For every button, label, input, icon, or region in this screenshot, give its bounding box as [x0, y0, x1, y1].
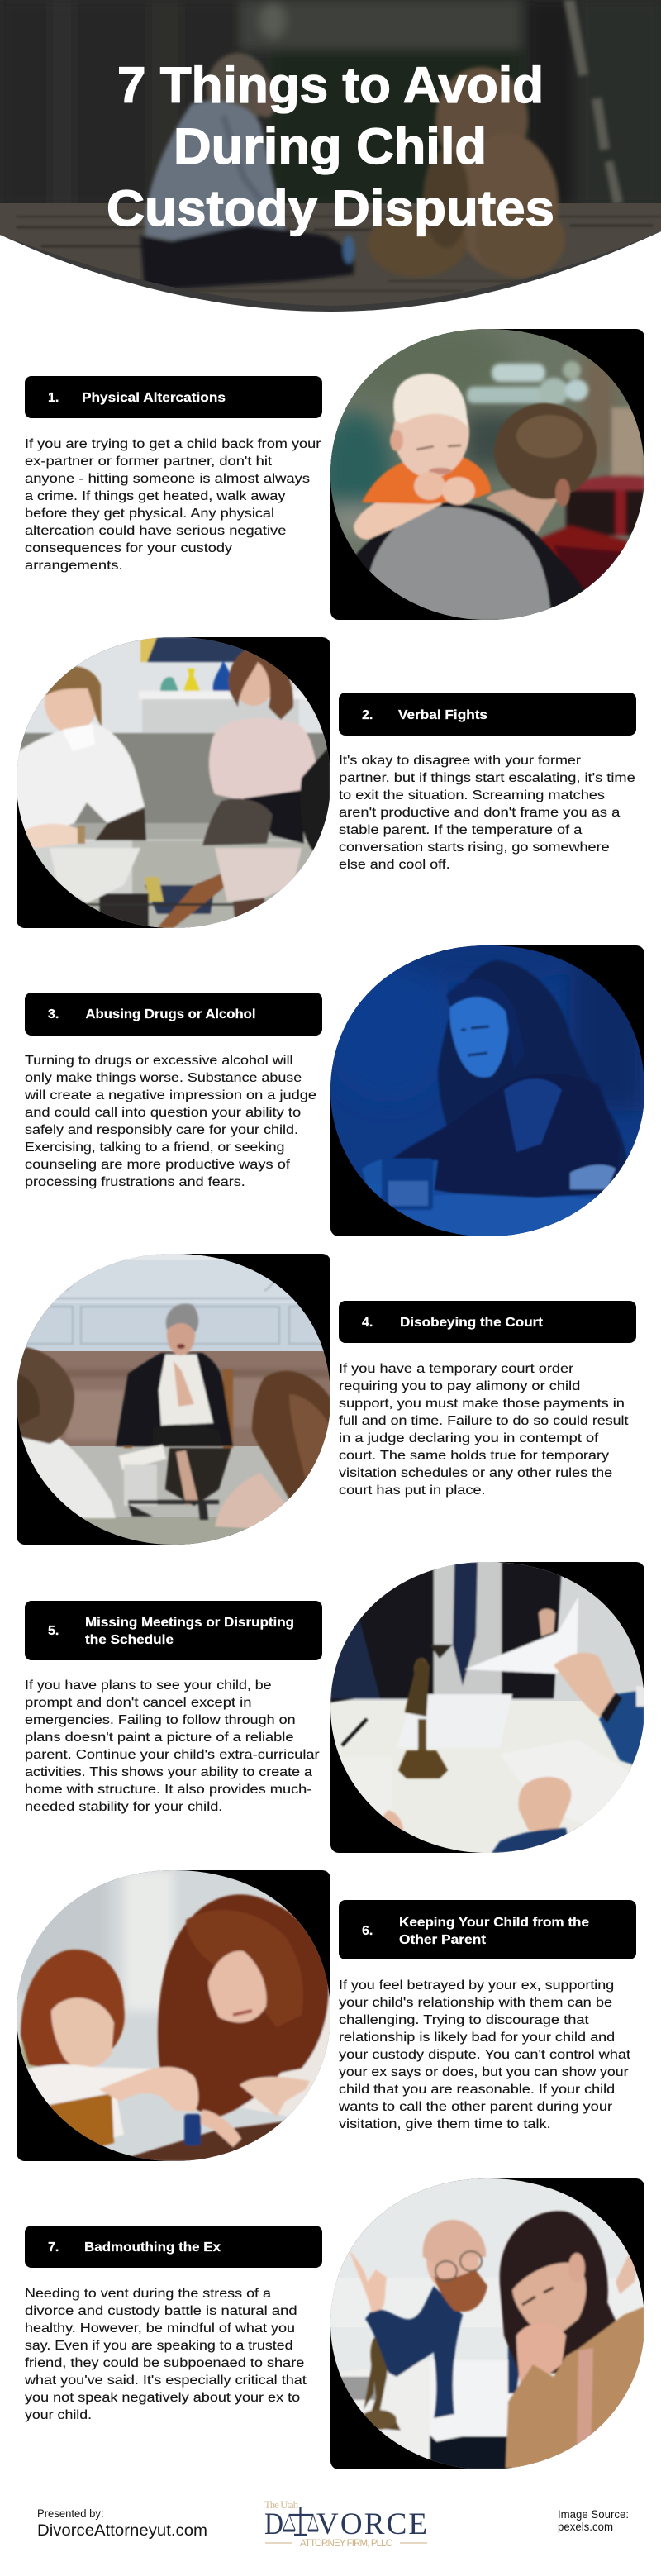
image source: Image Source: [558, 2507, 629, 2521]
body text: only make things worse. Substance abuse [25, 1071, 302, 1085]
panel: 5 Missing Meetings or Disrupting the Schedule [25, 1562, 644, 1853]
heading bar [339, 1900, 636, 1959]
body text: support, you must make those payments in [339, 1397, 625, 1411]
photo: shrugging man behind upset woman [330, 2178, 644, 2469]
body text: your custody dispute. You can't control what [339, 2048, 631, 2062]
body text: emergencies. Failing to follow through on [25, 1713, 296, 1727]
body text [24, 2287, 307, 2422]
presented by: Presented by: [37, 2507, 104, 2520]
body text: If you have a temporary court order [339, 1362, 573, 1376]
photo: crying child over father's shoulder [318, 321, 644, 620]
body text: full and on time. Failure to do so could result [339, 1414, 629, 1428]
body text: If you are trying to get a child back from your [25, 437, 321, 451]
heading bar [25, 2226, 322, 2268]
heading bar [25, 376, 322, 418]
body text: your ex says or does, but you can show your [339, 2065, 628, 2079]
body text: processing frustrations and fears. [25, 1175, 245, 1189]
heading bar: Other Parent [399, 1933, 487, 1947]
body text: court has put in place. [339, 1483, 486, 1498]
body text: wants to call the other parent during your [338, 2100, 612, 2114]
heading bar [339, 1301, 636, 1343]
photo: lawyers exchanging documents [330, 1562, 644, 1853]
title [107, 57, 554, 236]
heading bar [339, 693, 636, 736]
body text: aren't productive and don't frame you as a [339, 806, 621, 820]
logo: The Utah Divorce Attorney Firm [264, 2499, 427, 2549]
body text: your child. [25, 2408, 92, 2422]
body text: a crime. If things get heated, walk away [25, 489, 286, 503]
heading bar: 3. [48, 1007, 59, 1021]
body text: healthy. However, be mindful of what you [25, 2321, 295, 2336]
body text: Turning to drugs or excessive alcohol will [25, 1054, 292, 1068]
body text [338, 1978, 631, 2131]
body text: before they get physical. Any physical [25, 507, 274, 521]
body text: friend, they could be subpoenaed to share [25, 2356, 304, 2370]
panel: 1 Physical Altercations [25, 321, 644, 620]
body text: Exercising, talking to a friend, or seeking [25, 1140, 284, 1155]
body text: partner, but if things start escalating, it's time [339, 771, 635, 785]
presented by: DivorceAttorneyut.com [37, 2522, 207, 2540]
body text: safely and responsibly care for your child. [25, 1123, 298, 1137]
presented by [37, 2507, 207, 2540]
body text: consequences for your custody [25, 541, 232, 555]
body text: If you have plans to see your child, be [25, 1678, 271, 1693]
body text [339, 754, 635, 872]
body text: ex-partner or former partner, don't hit [25, 455, 273, 469]
body text [25, 1678, 320, 1814]
heading bar: 4. [362, 1316, 373, 1330]
body text: activities. This shows your ability to create a [25, 1765, 312, 1779]
logo: The Utah Divorce Attorney Firm: D [264, 2507, 283, 2541]
body text [24, 1054, 316, 1189]
heading bar [25, 993, 322, 1036]
heading bar: Missing Meetings or Disrupting [85, 1616, 294, 1630]
footer [37, 2499, 629, 2549]
body text: It's okay to disagree with your former [339, 754, 581, 768]
panel: 7 Badmouthing the Ex [24, 2178, 644, 2469]
body text: requiring you to pay alimony or child [339, 1379, 580, 1393]
body text: in a judge declaring you in contempt of [339, 1431, 599, 1445]
heading bar: Abusing Drugs or Alcohol [86, 1007, 256, 1021]
body text: else and cool off. [339, 858, 450, 872]
body text: divorce and custody battle is natural and [25, 2304, 297, 2318]
body text: altercation could have serious negative [25, 524, 286, 538]
heading bar: 7. [48, 2240, 59, 2255]
body text: visitation, give them time to talk. [339, 2117, 551, 2131]
body text: stable parent. If the temperature of a [339, 823, 583, 837]
heading bar: Badmouthing the Ex [84, 2240, 221, 2255]
heading bar: the Schedule [85, 1633, 174, 1647]
photo: mother and child with toy [17, 1870, 330, 2161]
heading bar: 6. [362, 1924, 373, 1938]
photo: woman in blue light with glass [330, 945, 644, 1236]
title: During Child [174, 118, 487, 174]
heading bar: 5. [48, 1624, 59, 1638]
heading bar: Disobeying the Court [400, 1316, 544, 1330]
heading bar: Keeping Your Child from the [399, 1916, 589, 1930]
body text: your child's relationship with them can be [339, 1996, 612, 2010]
body text: conversation starts rising, go somewhere [339, 840, 610, 855]
title: Custody Disputes [107, 180, 554, 236]
body text: child that you are reasonable. If your child [339, 2083, 615, 2097]
photo: couple on sofa [17, 637, 330, 928]
body text: say. Even if you are speaking to a trusted [25, 2339, 292, 2353]
body text: arrangements. [25, 559, 122, 573]
heading bar: 2. [362, 708, 373, 722]
body text: If you feel betrayed by your ex, supporting [339, 1978, 614, 1993]
body text: relationship is likely bad for your child and [339, 2031, 615, 2045]
panel: 4 Disobeying the Court [0, 1254, 636, 1545]
body text: anyone - hitting someone is almost always [25, 472, 310, 486]
body text: home with structure. It also provides much- [25, 1783, 311, 1797]
heading bar [25, 1601, 322, 1660]
body text [339, 1362, 629, 1498]
hero banner [0, 0, 661, 314]
panel: 3 Abusing Drugs or Alcohol [24, 933, 653, 1243]
body text: and could call into question your ability to [25, 1106, 301, 1120]
heading bar: 1. [48, 391, 59, 405]
heading bar: Physical Altercations [82, 391, 226, 405]
logo: The Utah Divorce Attorney Firm: The Utah [264, 2499, 299, 2511]
body text: you not speak negatively about your ex to [25, 2391, 300, 2405]
body text: will create a negative impression on a judge [24, 1088, 316, 1102]
body text: parent. Continue your child's extra-curricular [25, 1748, 320, 1762]
body text: plans doesn't paint a picture of a reliable [25, 1731, 294, 1745]
photo: judge seated facing two people [17, 1254, 330, 1545]
body text: prompt and don't cancel except in [25, 1696, 251, 1710]
body text: needed stability for your child. [25, 1800, 222, 1814]
body text: visitation schedules or any other rules the [339, 1466, 612, 1480]
image source [558, 2507, 629, 2533]
body text [25, 437, 321, 573]
heading bar: Verbal Fights [398, 708, 487, 722]
image source: pexels.com [558, 2520, 613, 2533]
body text: to exit the situation. Screaming matches [339, 788, 605, 802]
body text: what you've said. It's especially critical that [24, 2374, 307, 2388]
body text: counseling are more productive ways of [25, 1158, 291, 1172]
panel: 2 Verbal Fights [17, 637, 636, 928]
title: 7 Things to Avoid [117, 57, 544, 113]
panel: 6 Keeping Your Child from the Other Parent [17, 1870, 636, 2161]
body text: Needing to vent during the stress of a [25, 2287, 271, 2301]
logo: The Utah Divorce Attorney Firm: ATTORNEY FIRM, PLLC [300, 2539, 392, 2549]
logo: The Utah Divorce Attorney Firm: VORCE [316, 2507, 427, 2541]
body text: court. The same holds true for temporary [339, 1449, 609, 1463]
body text: challenging. Trying to discourage that [339, 2013, 589, 2027]
